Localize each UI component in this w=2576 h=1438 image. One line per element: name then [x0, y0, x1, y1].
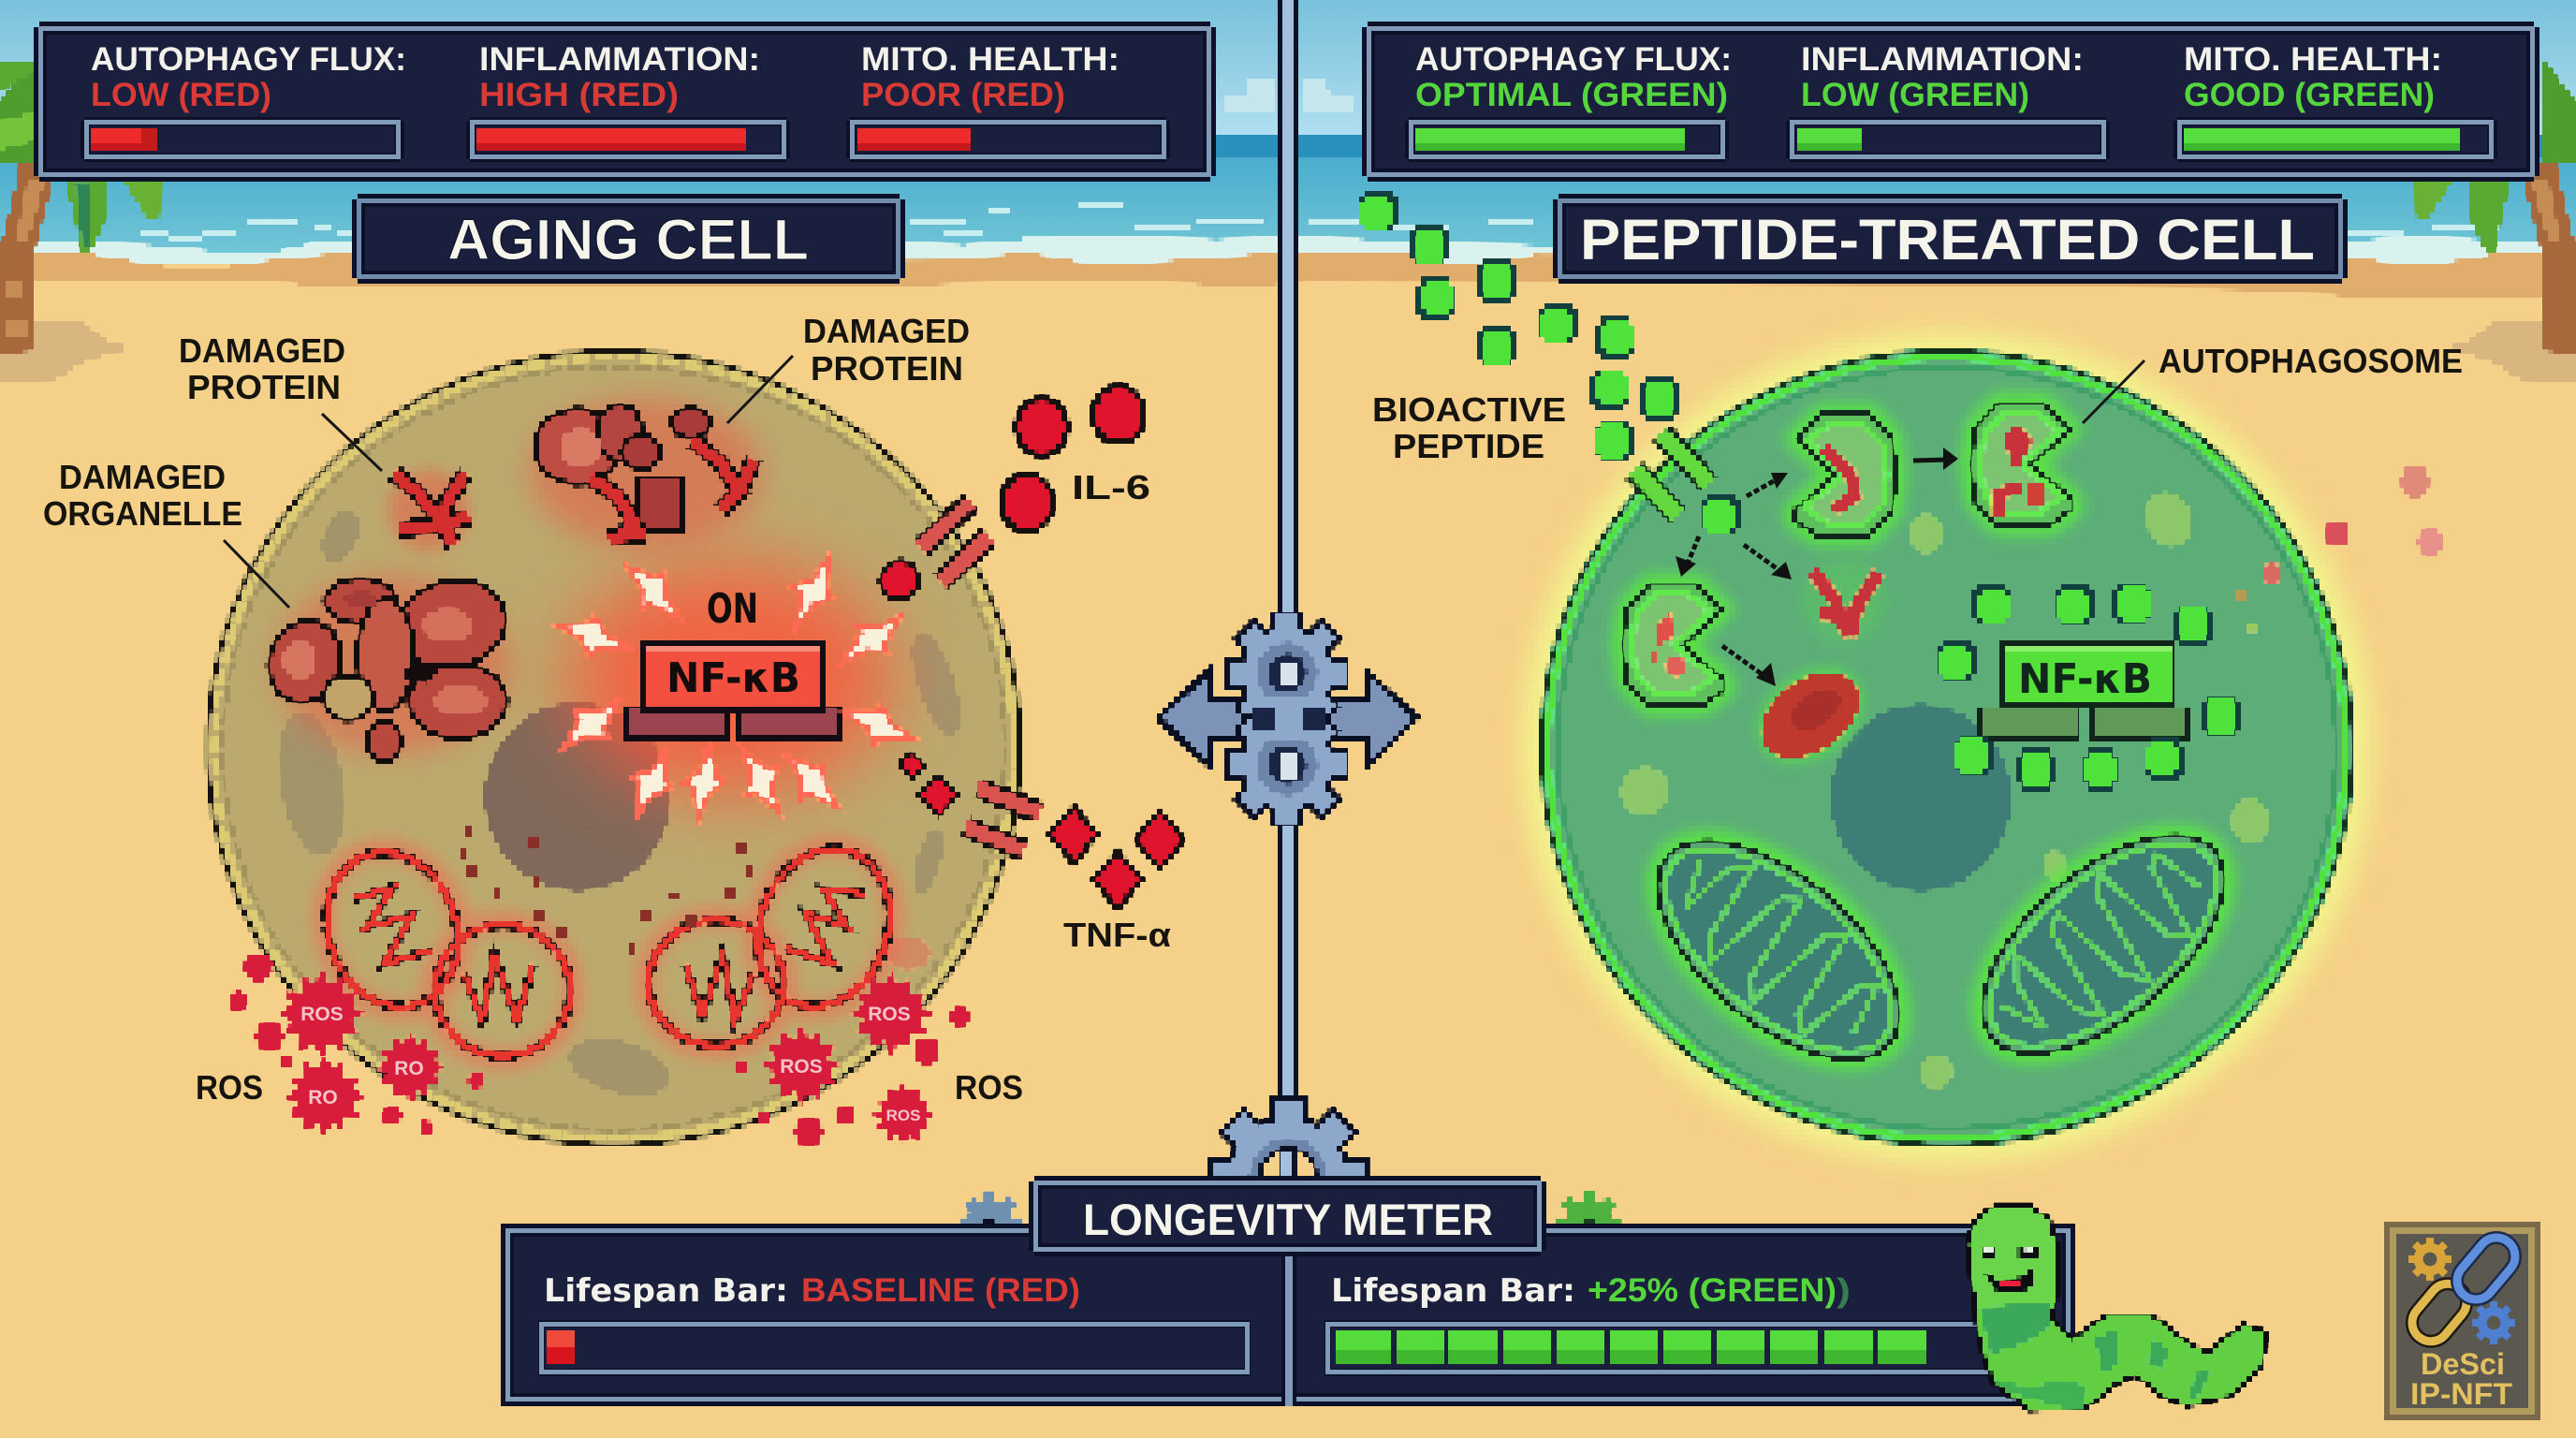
panel: aging cell stats — [34, 22, 1216, 182]
damaged protein small — [388, 469, 470, 551]
IL-6 molecules — [881, 387, 1144, 600]
lifespan bar baseline: BASELINE (RED) — [801, 1272, 1080, 1309]
IL-6 receptor — [920, 503, 989, 582]
lifespan bar plus 25 percent — [1325, 1272, 2020, 1376]
label: damaged protein left: DAMAGED — [179, 331, 345, 370]
ON label: ON — [707, 585, 758, 633]
palm tree right — [2415, 58, 2576, 384]
protein fragments inside autophagosomes — [1651, 428, 2045, 677]
label: bioactive peptide — [1372, 390, 1566, 465]
TNF receptor — [965, 787, 1039, 850]
DeSci IP-NFT badge: DeSci — [2421, 1347, 2505, 1381]
lifespan bar plus 25 percent: Lifespan Bar: — [1331, 1272, 1575, 1310]
stat: mito health poor — [846, 41, 1170, 162]
damaged mitochondrion left — [300, 829, 574, 1060]
ROS star labels: ROS — [868, 1004, 911, 1025]
stat: mito health poor: MITO. HEALTH: — [861, 41, 1120, 78]
label: IL-6: IL-6 — [1072, 468, 1150, 506]
label: damaged protein left — [179, 331, 345, 406]
stat: mito health good — [2174, 41, 2497, 162]
stat: autophagy flux low — [80, 41, 406, 162]
center gears and arrows — [1159, 615, 1416, 823]
stat: mito health poor: POOR (RED) — [861, 77, 1065, 113]
stat: inflammation low: LOW (GREEN) — [1801, 77, 2029, 113]
autophagosome with red fragments — [1970, 404, 2072, 525]
autophagosome digesting organelle — [1622, 584, 1724, 706]
label: autophagosome: AUTOPHAGOSOME — [2159, 342, 2463, 380]
stat: mito health good: MITO. HEALTH: — [2184, 41, 2442, 78]
label: damaged organelle — [43, 458, 242, 533]
stat: autophagy flux low: LOW (RED) — [91, 77, 271, 113]
arrows — [1676, 448, 1958, 686]
arrow left — [1159, 671, 1254, 766]
NF-kB subunits and box — [624, 639, 842, 740]
label: bioactive peptide: BIOACTIVE — [1372, 390, 1566, 429]
lifespan bar baseline — [538, 1272, 1251, 1376]
small blue gear — [960, 1191, 1022, 1224]
blue gear — [2472, 1301, 2515, 1344]
gear upper — [1229, 615, 1345, 731]
label: damaged protein right — [803, 312, 970, 388]
gear lower — [1229, 707, 1345, 823]
label: damaged organelle: ORGANELLE — [43, 494, 242, 533]
stat: autophagy flux optimal: AUTOPHAGY FLUX: — [1415, 41, 1732, 78]
stat: inflammation high: HIGH (RED) — [479, 77, 679, 113]
label: ROS right: ROS — [955, 1068, 1023, 1107]
damaged protein being cleared — [1803, 560, 1885, 642]
ROS star labels: ROS — [780, 1056, 823, 1078]
ROS star labels — [300, 1004, 920, 1124]
NF-kB glow — [566, 562, 894, 796]
receptor — [1634, 433, 1708, 515]
stat: mito health good: GOOD (GREEN) — [2184, 77, 2435, 113]
center divider pole — [1278, 0, 1298, 1180]
panel: longevity meter — [501, 1176, 2075, 1406]
base half gear — [1208, 1095, 1370, 1176]
stat: autophagy flux optimal — [1405, 41, 1732, 162]
TNF-alpha molecules — [899, 753, 1183, 908]
panel: peptide-treated cell diagram — [1357, 191, 2463, 1162]
lifespan bar plus 25 percent: ) — [1837, 1272, 1851, 1309]
gold gear — [2408, 1238, 2452, 1281]
stat: inflammation low: INFLAMMATION: — [1801, 41, 2084, 78]
label: damaged organelle: DAMAGED — [59, 458, 226, 496]
damaged mitochondrion right — [645, 826, 915, 1049]
heading: peptide-treated cell: PEPTIDE-TREATED CELL — [1580, 208, 2315, 271]
NF-kB treated label: NF-κB — [2018, 655, 2152, 703]
heading: longevity meter: LONGEVITY METER — [1083, 1195, 1493, 1244]
small green gear — [1556, 1191, 1621, 1224]
label: damaged protein right: PROTEIN — [811, 349, 963, 388]
peptide dots around NF-kB — [1937, 583, 2241, 790]
label: bioactive peptide: PEPTIDE — [1393, 427, 1544, 465]
arrow right — [1320, 671, 1416, 766]
lifespan bar plus 25 percent: +25% (GREEN) — [1588, 1272, 1837, 1309]
stat: inflammation low — [1786, 41, 2110, 162]
healthy mitochondrion left — [1620, 801, 1937, 1099]
bioactive peptide dots — [1357, 191, 1740, 536]
heading: longevity meter — [1029, 1176, 1546, 1256]
label: TNF-alpha: TNF-α — [1063, 916, 1171, 954]
damaged organelle — [257, 569, 516, 762]
healthy mitochondrion right — [1945, 796, 2261, 1093]
stat: autophagy flux optimal: OPTIMAL (GREEN) — [1415, 77, 1728, 113]
cell membrane and cytoplasm — [205, 348, 1183, 1148]
mitochondria debris — [459, 824, 754, 954]
panel: aging cell diagram — [43, 312, 1183, 1148]
label: ROS left: ROS — [196, 1068, 263, 1107]
lifespan bar baseline: Lifespan Bar: — [544, 1272, 788, 1310]
blue chain link — [2450, 1230, 2523, 1307]
lightning bolts — [551, 551, 918, 822]
worm mascot — [1966, 1202, 2269, 1414]
cell membrane and cytoplasm — [1357, 191, 2442, 1162]
label: damaged protein left: PROTEIN — [187, 368, 341, 406]
stat: autophagy flux low: AUTOPHAGY FLUX: — [91, 41, 406, 78]
nucleus — [484, 702, 671, 891]
NF-kB subunits and box — [1978, 641, 2190, 741]
DeSci IP-NFT badge: IP-NFT — [2410, 1377, 2512, 1411]
label: damaged protein right: DAMAGED — [803, 312, 970, 350]
heading: aging cell — [352, 194, 905, 284]
gold chain link — [2405, 1276, 2474, 1349]
heading: aging cell: AGING CELL — [447, 208, 809, 271]
leader line: autophagosome — [2083, 360, 2144, 423]
damaged organelle being cleared — [1742, 651, 1879, 780]
heading: peptide-treated cell — [1553, 194, 2348, 284]
ROS star labels: RO — [308, 1087, 338, 1108]
stat: inflammation high — [466, 41, 790, 162]
floating cleared particles — [2236, 465, 2442, 632]
ROS star labels: RO — [394, 1058, 424, 1079]
stat: inflammation high: INFLAMMATION: — [479, 41, 760, 78]
panel: treated cell stats — [1362, 22, 2539, 182]
ROS star labels: ROS — [886, 1107, 920, 1124]
palm tree left — [0, 58, 161, 384]
worm face — [1983, 1248, 2039, 1294]
NF-kB aging label: NF-κB — [666, 654, 800, 702]
autophagosome engulfing protein — [1794, 414, 1896, 536]
ROS star labels: ROS — [300, 1004, 344, 1025]
damaged protein cluster — [529, 398, 763, 548]
DeSci IP-NFT badge — [2384, 1222, 2540, 1420]
ROS stars — [228, 953, 969, 1146]
leader lines — [224, 356, 793, 608]
